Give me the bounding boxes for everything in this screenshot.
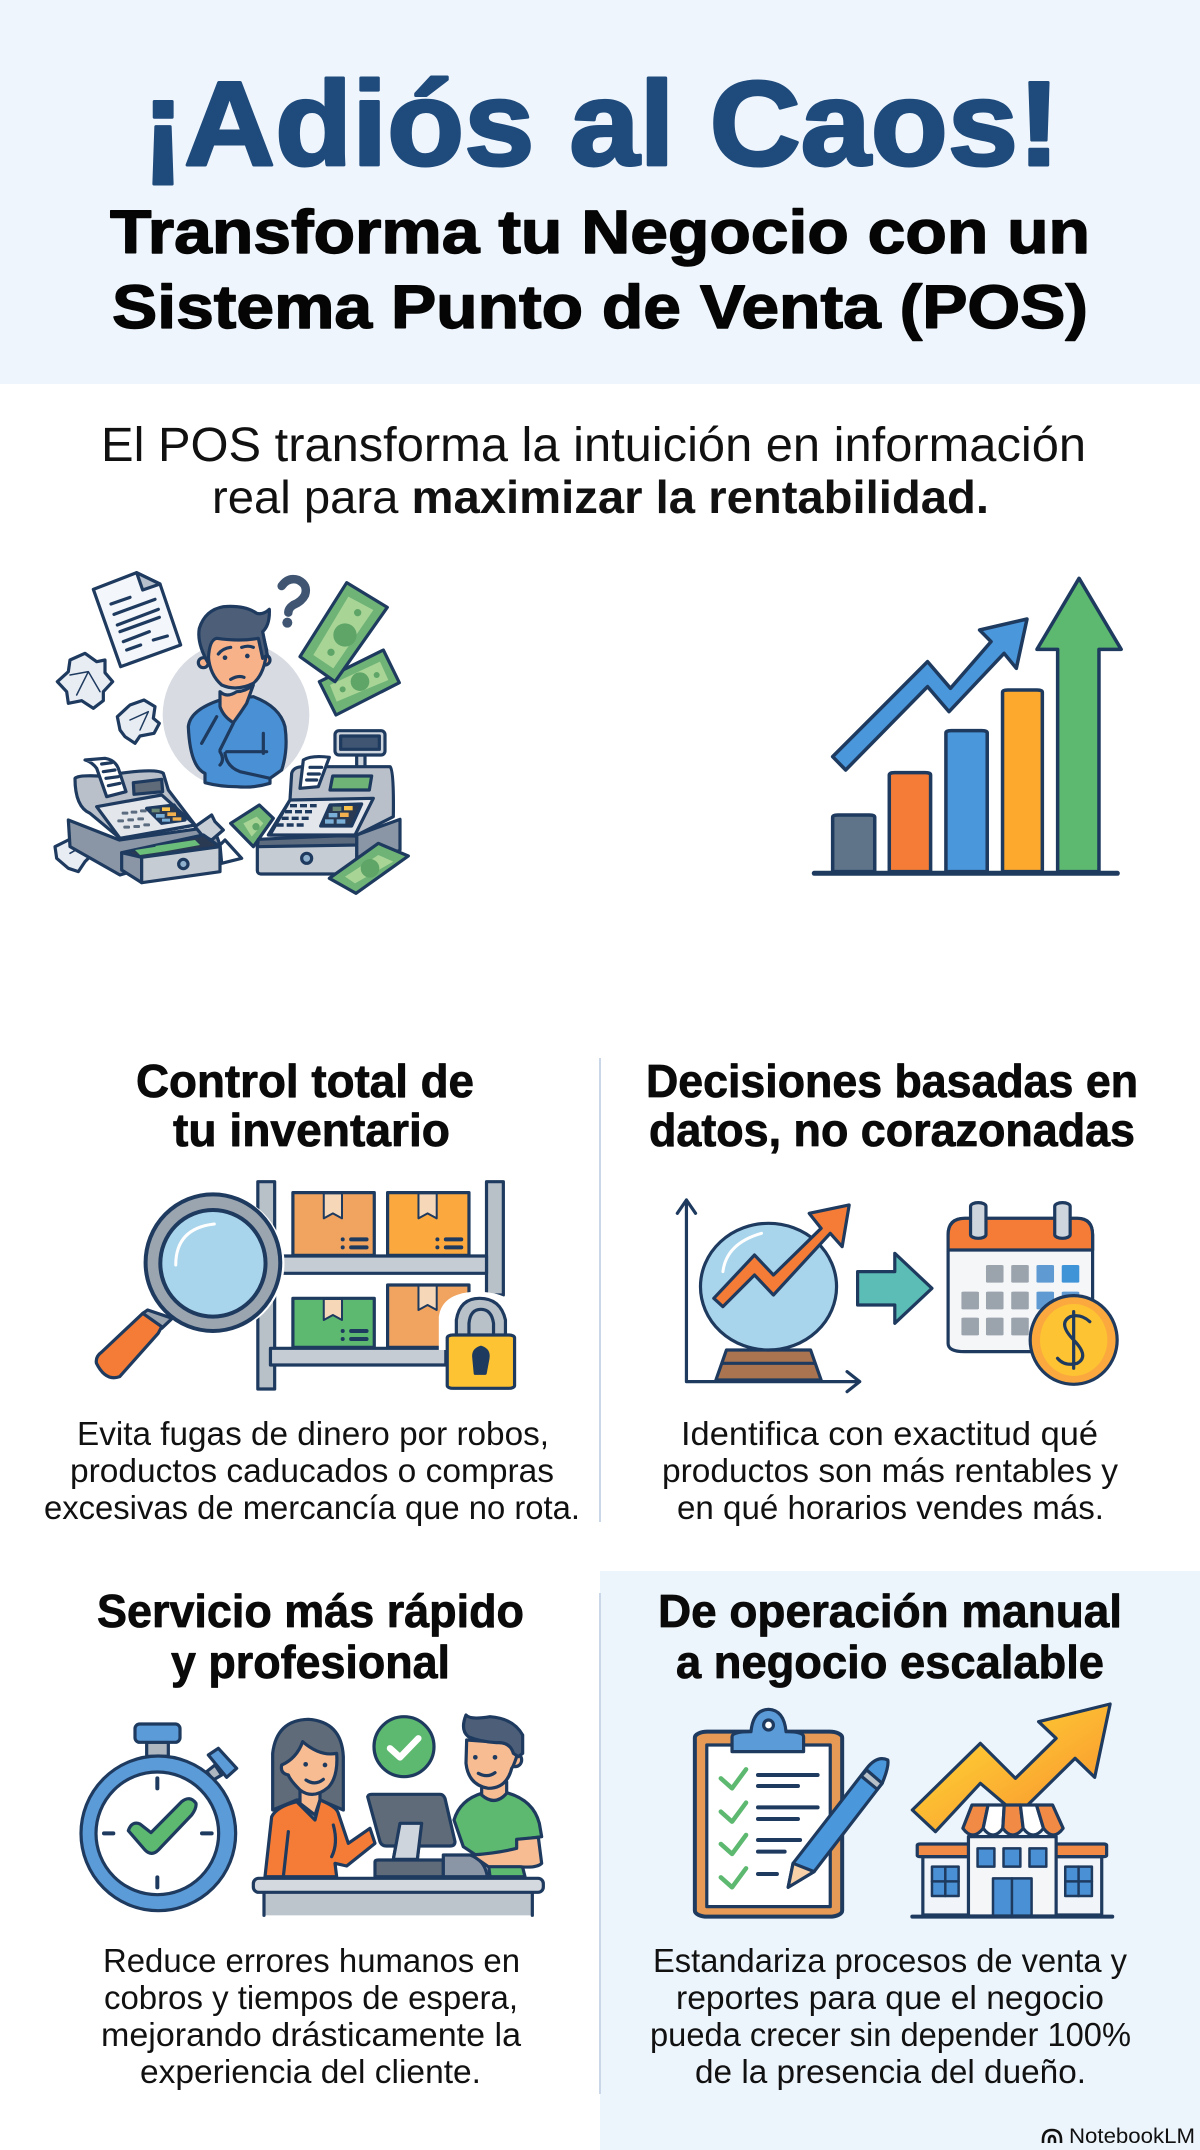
divider bottom xyxy=(599,1593,601,2094)
description: pueda crecer sin depender 100% xyxy=(650,2016,1131,2053)
clipboard xyxy=(695,1732,842,1917)
growth chart xyxy=(814,578,1121,873)
pen xyxy=(788,1759,888,1887)
icon: shelves, magnifier and lock xyxy=(96,1182,519,1389)
right cash register xyxy=(257,731,400,874)
section: decisiones basadas en datos xyxy=(646,1055,1138,1526)
check bubble xyxy=(374,1717,434,1777)
description: cobros y tiempos de espera, xyxy=(104,1979,518,2016)
heading xyxy=(97,1585,524,1688)
heading: Control total de xyxy=(136,1055,474,1107)
description: reportes para que el negocio xyxy=(676,1979,1104,2016)
description: experiencia del cliente. xyxy=(140,2053,481,2090)
description xyxy=(650,1942,1131,2090)
bill behind right register xyxy=(231,805,273,847)
heading xyxy=(646,1055,1138,1156)
loose bill xyxy=(329,843,408,893)
woman xyxy=(265,1719,375,1877)
document xyxy=(93,573,181,667)
description: Reduce errores humanos en xyxy=(103,1942,520,1979)
green arrow xyxy=(1037,578,1121,872)
divider top xyxy=(599,1058,601,1522)
illustration: confused owner with cash registers xyxy=(55,573,408,893)
description: de la presencia del dueño. xyxy=(695,2053,1086,2090)
bars xyxy=(833,690,1042,872)
left cash register xyxy=(68,758,242,883)
description: Estandariza procesos de venta y xyxy=(653,1942,1127,1979)
icon: clipboard and growing store xyxy=(695,1704,1112,1917)
monitor and register xyxy=(368,1794,542,1877)
person xyxy=(188,606,286,787)
magnifier xyxy=(141,1192,284,1334)
intro statement xyxy=(101,419,1086,523)
subtitle xyxy=(110,198,1090,341)
description xyxy=(44,1415,580,1526)
title: ¡Adiós al Caos! xyxy=(142,57,1060,191)
heading: a negocio escalable xyxy=(676,1636,1104,1688)
heading: De operación manual xyxy=(658,1585,1122,1637)
icon: crystal ball, arrow and calendar xyxy=(677,1200,1117,1392)
heading: y profesional xyxy=(171,1636,450,1688)
description xyxy=(662,1415,1119,1526)
blue trend arrow xyxy=(833,619,1027,770)
header band xyxy=(0,0,1200,384)
description: mejorando drásticamente la xyxy=(101,2016,522,2053)
store xyxy=(923,1857,1102,1915)
intro statement: El POS transforma la intuición en información xyxy=(101,419,1086,472)
subtitle: Transforma tu Negocio con un xyxy=(110,198,1090,266)
crumpled papers xyxy=(55,653,159,872)
NotebookLM logo: NotebookLM xyxy=(1069,2125,1195,2148)
heading: Servicio más rápido xyxy=(97,1585,524,1637)
panel: highlighted bottom right xyxy=(600,1571,1200,2150)
bills xyxy=(300,583,399,715)
subtitle: Sistema Punto de Venta (POS) xyxy=(112,273,1088,341)
intro statement: real para maximizar la rentabilidad. xyxy=(212,471,989,523)
description: excesivas de mercancía que no rota. xyxy=(44,1489,580,1526)
heading xyxy=(136,1055,474,1156)
lock xyxy=(439,1292,519,1350)
grey circle xyxy=(163,642,309,788)
description: productos son más rentables y xyxy=(662,1452,1119,1489)
heading xyxy=(658,1585,1122,1688)
man xyxy=(454,1715,542,1877)
question mark xyxy=(282,579,306,628)
heading: Decisiones basadas en xyxy=(646,1055,1138,1107)
heading: datos, no corazonadas xyxy=(649,1104,1135,1156)
icon: stopwatch and cashier with client xyxy=(81,1715,543,1915)
axis xyxy=(814,871,1117,876)
section: control de inventario xyxy=(44,1055,580,1526)
description: productos caducados o compras xyxy=(70,1452,554,1489)
section: servicio rapido xyxy=(81,1585,543,2090)
section: negocio escalable xyxy=(650,1585,1131,2090)
description: Identifica con exactitud qué xyxy=(681,1415,1098,1452)
description: Evita fugas de dinero por robos, xyxy=(77,1415,549,1452)
rising arrow xyxy=(912,1704,1110,1832)
stopwatch xyxy=(81,1724,237,1911)
description xyxy=(101,1942,522,2090)
heading: tu inventario xyxy=(173,1104,450,1156)
description: en qué horarios vendes más. xyxy=(677,1489,1104,1526)
counter xyxy=(253,1878,543,1915)
